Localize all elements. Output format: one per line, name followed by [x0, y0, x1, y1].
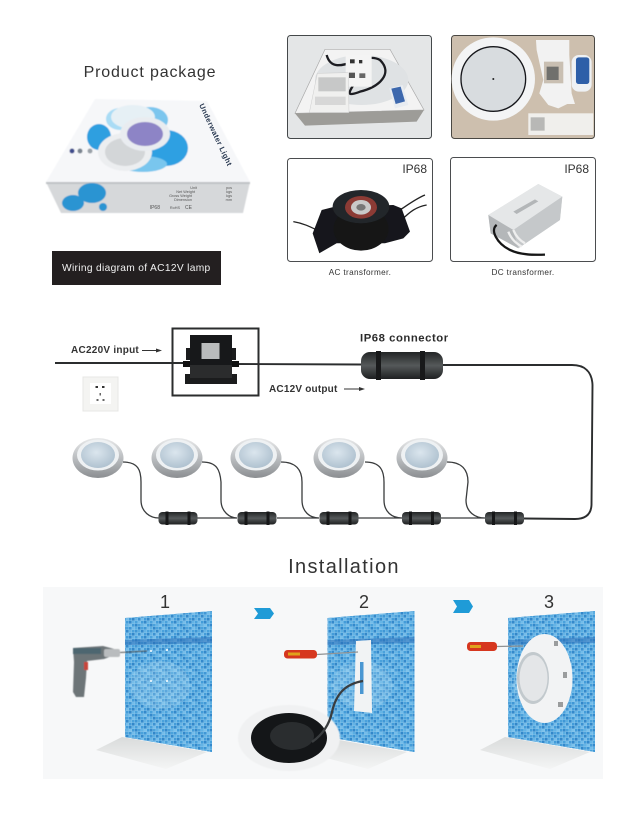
- panel: installation steps: [43, 587, 603, 779]
- box side specification: pcs: [226, 186, 232, 190]
- box side specification: [150, 186, 232, 211]
- connector 3: [320, 512, 358, 525]
- label: AC220V input: AC220V input: [71, 345, 139, 356]
- lamp 1: [72, 438, 124, 478]
- connector 4: [402, 512, 441, 525]
- arrow: step 1 to 2: [254, 608, 274, 619]
- box side specification: Gross Weight: [169, 194, 193, 198]
- label: IP68 connector: IP68 connector: [360, 332, 449, 344]
- screwdriver, step 2: [284, 650, 358, 658]
- step 1 floor shadow: [96, 737, 207, 769]
- icon: drill: [73, 646, 147, 697]
- lamp 5: [396, 438, 448, 478]
- step 3 tile wall: [508, 611, 595, 752]
- cable, step 2: [312, 681, 363, 742]
- step 2 floor shadow: [296, 737, 407, 769]
- box side specification: kgs: [226, 194, 232, 198]
- box side specification: mm: [226, 198, 232, 202]
- lamp 4: [314, 438, 364, 478]
- connector 2: [238, 512, 276, 525]
- connector 1: [158, 512, 198, 525]
- IP68 rating: IP68: [564, 162, 589, 176]
- connector 5: [485, 512, 524, 525]
- heading: installation: Installation: [288, 556, 400, 578]
- icon: DC transformer: [488, 184, 562, 255]
- panel: AC transformer: [288, 158, 432, 262]
- panel: open box photo: [288, 36, 432, 138]
- box label: underwater light: Underwater Light: [197, 102, 234, 168]
- lamp 2: [152, 438, 202, 478]
- step 2 tile wall: [328, 611, 414, 752]
- caption: AC transformer: AC transformer.: [329, 268, 391, 277]
- heading: product package: Product package: [84, 64, 216, 81]
- step 1 number: 1: [160, 592, 170, 612]
- main power cable: [55, 363, 592, 519]
- box side specification: Net Weight: [176, 190, 196, 194]
- installed lamp: [516, 634, 572, 723]
- box side specification: Unit: [190, 186, 198, 190]
- label: AC12V output: AC12V output: [269, 384, 338, 395]
- arrow: step 2 to 3: [453, 600, 473, 613]
- in-wall lamp housing: [238, 705, 340, 771]
- panel: DC transformer: [450, 158, 596, 262]
- caption: DC transformer: DC transformer.: [491, 268, 555, 277]
- mounting plate: [354, 640, 372, 713]
- product box photo: [46, 99, 250, 213]
- box side specification: Dimension: [174, 198, 192, 202]
- step 2 number: 2: [359, 592, 369, 612]
- lamp 3: [230, 438, 282, 478]
- lamp wiring: [123, 462, 485, 518]
- panel: wiring diagram label: [52, 251, 221, 285]
- IP68 connector: [361, 351, 443, 380]
- step 3 floor shadow: [480, 737, 590, 769]
- icon: AC transformer: [293, 190, 427, 253]
- step 3 number: 3: [544, 592, 554, 612]
- step 1 tile wall: [125, 611, 212, 752]
- wall socket: [83, 377, 118, 411]
- drill holes: [150, 649, 168, 682]
- screwdriver, step 3: [467, 642, 523, 651]
- panel: unpacked lamp photo: [452, 36, 594, 138]
- transformer in frame: [172, 328, 258, 396]
- box side specification: RoHS: [170, 206, 180, 210]
- box side specification: kgs: [226, 190, 232, 194]
- box side specification: IP68: [150, 205, 160, 211]
- panel: wiring diagram label: Wiring diagram of AC12V lamp: [62, 263, 211, 274]
- IP68 rating: IP68: [402, 162, 427, 176]
- box side specification: CE: [185, 205, 193, 211]
